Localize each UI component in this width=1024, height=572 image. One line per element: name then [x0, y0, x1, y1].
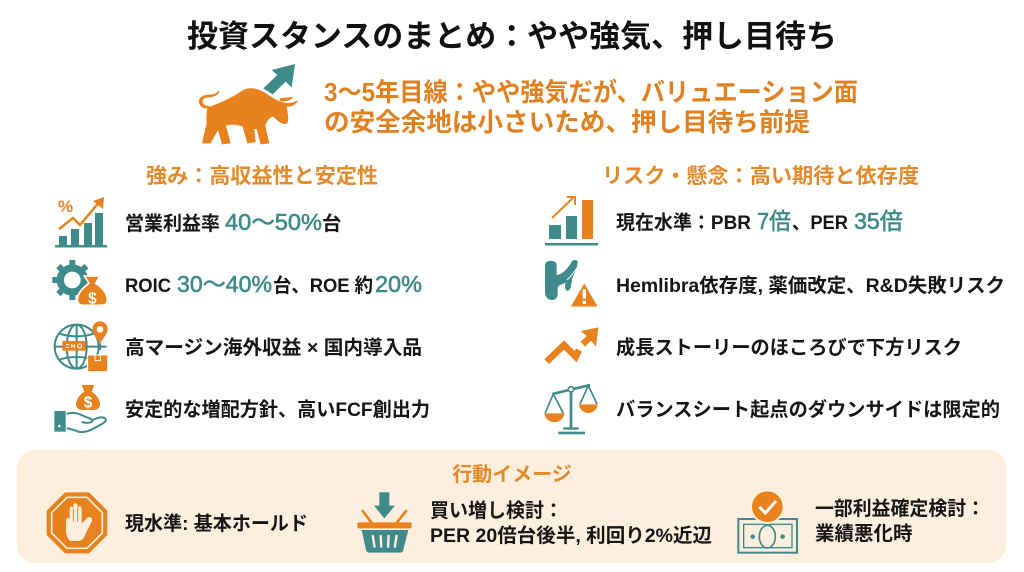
text: buy more	[430, 500, 712, 547]
title: 投資スタンスのまとめ：やや強気、押し目待ち	[187, 19, 837, 54]
text: operating margin: 40〜50%	[225, 209, 322, 235]
icon: valuation bars	[545, 197, 598, 246]
panel: risks	[544, 165, 1005, 434]
text: current valuation: 、PER	[792, 212, 848, 234]
icon: shopping basket	[357, 492, 412, 553]
icon: zigzag arrow	[547, 327, 598, 362]
icon: percent growth chart	[55, 197, 107, 248]
text: take profit: 一部利益確定検討：	[815, 498, 985, 520]
heading: risks: リスク・懸念：高い期待と依存度	[602, 165, 919, 188]
text: ROIC and ROE: 30〜40%	[177, 271, 272, 297]
text: take profit: 業績悪化時	[815, 523, 913, 545]
icon: bull with rising arrow	[199, 64, 298, 144]
text: balance sheet: バランスシート起点のダウンサイドは限定的	[616, 398, 1000, 421]
icon: Hemlibra H with warning	[545, 260, 599, 307]
text: overseas revenue: 高マージン海外収益 × 国内導入品	[125, 336, 422, 359]
text: Hemlibra dependence: Hemlibra依存度, 薬価改定、R&D失敗リスク	[616, 275, 1005, 297]
text: ROIC and ROE	[125, 271, 422, 297]
text: dividends and FCF: 安定的な増配方針、高いFCF創出力	[125, 398, 430, 421]
icon: check coin and banknote	[738, 489, 797, 553]
subtitle: 3〜5年目線：やや強気だが、バリュエーション面	[324, 78, 858, 107]
text: take profit	[815, 498, 985, 545]
text: current valuation	[616, 208, 903, 234]
heading: action image: 行動イメージ	[452, 463, 572, 486]
text: current valuation: 現在水準：PBR	[616, 212, 751, 234]
text: hold: 現水準: 基本ホールド	[125, 512, 308, 535]
icon: hand with money bag: $	[84, 395, 93, 412]
text: current valuation: 35倍	[854, 208, 903, 234]
text: operating margin: 営業利益率	[125, 213, 220, 235]
text: ROIC and ROE: 台、ROE 約	[273, 275, 373, 297]
text: ROIC and ROE: ROIC	[125, 275, 171, 297]
subtitle	[324, 78, 858, 137]
panel: strengths	[52, 165, 430, 432]
icon: percent growth chart: %	[58, 197, 73, 216]
heading: strengths: 強み：高収益性と安定性	[146, 165, 378, 188]
text: growth story: 成長ストーリーのほころびで下方リスク	[616, 336, 962, 359]
panel: action image	[17, 450, 1006, 563]
icon: globe with pin and box	[55, 321, 108, 372]
icon: stop hand	[47, 492, 107, 553]
subtitle: の安全余地は小さいため、押し目待ち前提	[324, 109, 810, 137]
text: buy more: 買い増し検討：	[430, 500, 563, 522]
icon: gear and money bag	[52, 260, 107, 307]
text: ROIC and ROE: 20%	[375, 271, 422, 297]
text: operating margin: 台	[322, 213, 342, 235]
text: operating margin	[125, 209, 342, 235]
icon: balance scale	[544, 385, 598, 434]
text: current valuation: 7倍	[757, 208, 791, 234]
icon: gear and money bag: $	[88, 290, 97, 307]
text: buy more: PER 20倍台後半, 利回り2%近辺	[430, 525, 712, 547]
icon: hand with money bag	[54, 385, 106, 432]
